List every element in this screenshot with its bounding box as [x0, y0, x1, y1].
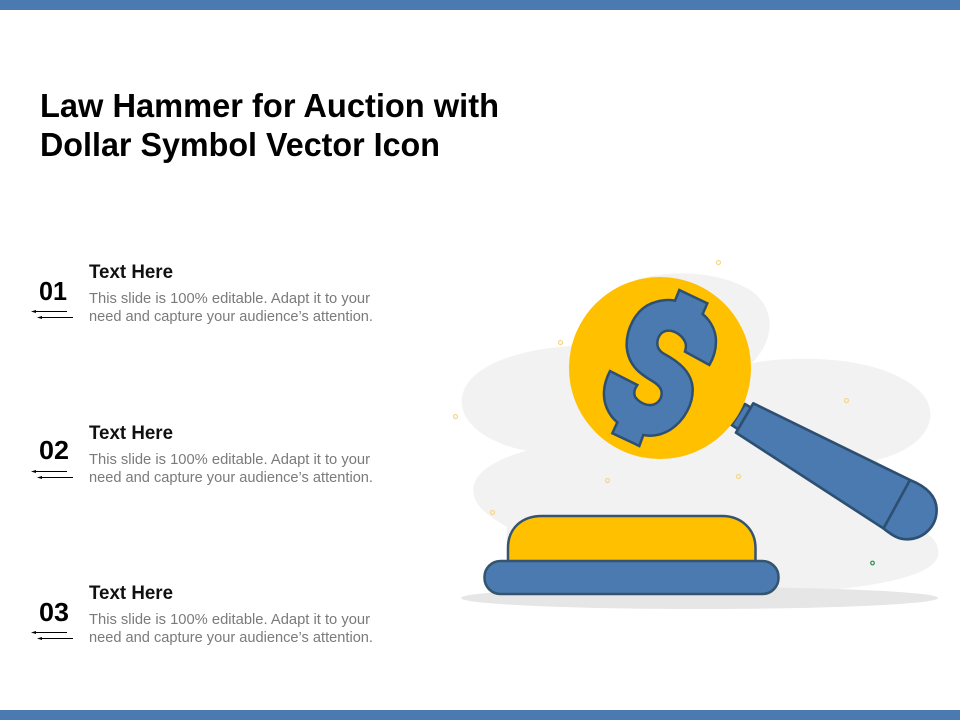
- ground shadow: [461, 587, 938, 609]
- item 03: [31, 583, 373, 646]
- heading 01: Text Here: [89, 262, 173, 283]
- gavel head circle: [569, 277, 751, 459]
- dollar symbol: [604, 290, 716, 446]
- heading 02: Text Here: [89, 423, 173, 444]
- title: Dollar Symbol Vector Icon: [40, 126, 440, 163]
- illustration: gavel with dollar symbol: [454, 260, 938, 609]
- title: [40, 87, 499, 163]
- gavel base top: [508, 516, 756, 562]
- body 01: need and capture your audience’s attention.: [89, 309, 373, 325]
- arrows 03: [31, 631, 73, 640]
- body 02: need and capture your audience’s attention.: [89, 470, 373, 486]
- body 03: This slide is 100% editable. Adapt it to your: [89, 612, 370, 628]
- body 02: This slide is 100% editable. Adapt it to your: [89, 452, 370, 468]
- background blob: [462, 273, 938, 593]
- arrows 02: [31, 470, 73, 479]
- body 03: need and capture your audience’s attention.: [89, 630, 373, 646]
- item 02: [31, 423, 373, 486]
- sparkle dots: [454, 260, 874, 565]
- arrows 01: [31, 310, 73, 319]
- top bar: [0, 0, 960, 10]
- body 02: [89, 452, 373, 486]
- body 03: [89, 612, 373, 646]
- heading 03: Text Here: [89, 583, 173, 604]
- number 01: 01: [39, 276, 67, 306]
- number 02: 02: [39, 435, 69, 465]
- title: Law Hammer for Auction with: [40, 87, 499, 124]
- gavel handle: [732, 403, 937, 539]
- body 01: [89, 291, 373, 325]
- number 03: 03: [39, 597, 69, 627]
- body 01: This slide is 100% editable. Adapt it to your: [89, 291, 370, 307]
- gavel base plate: [484, 561, 778, 594]
- bottom bar: [0, 710, 960, 720]
- item 01: [31, 262, 373, 325]
